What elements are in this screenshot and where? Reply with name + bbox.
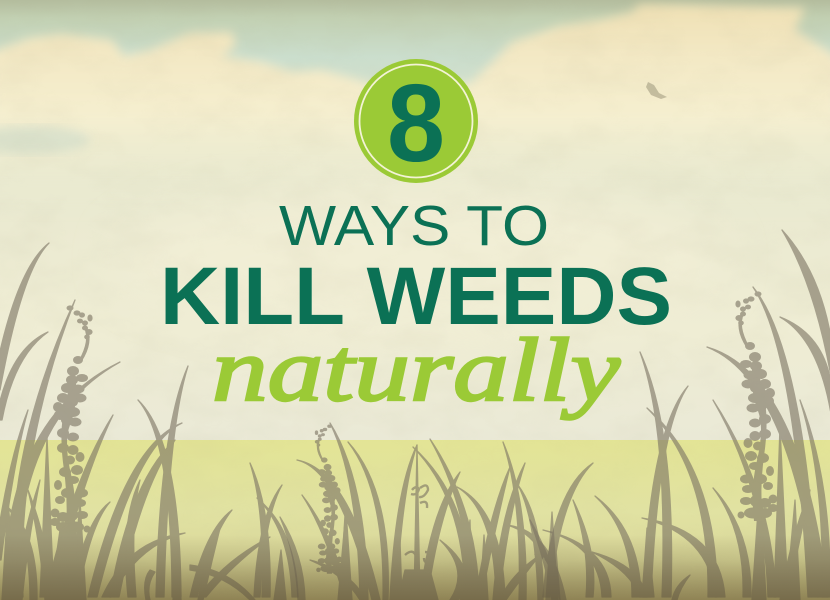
title line: naturally: naturally xyxy=(212,321,620,420)
background: sky xyxy=(0,0,830,442)
badge: green circle with number 8: 8 xyxy=(387,62,445,185)
title line: KILL WEEDS: KILL WEEDS xyxy=(160,251,672,342)
background: field xyxy=(0,440,830,600)
grass: center cluster xyxy=(274,423,566,600)
title line: WAYS TO: WAYS TO xyxy=(279,194,549,258)
bottom shading xyxy=(0,535,830,600)
paper speck: sky xyxy=(646,82,667,99)
grass: left cluster xyxy=(0,243,298,600)
badge: green circle with number 8 xyxy=(354,59,478,185)
grass: right cluster xyxy=(530,230,830,600)
